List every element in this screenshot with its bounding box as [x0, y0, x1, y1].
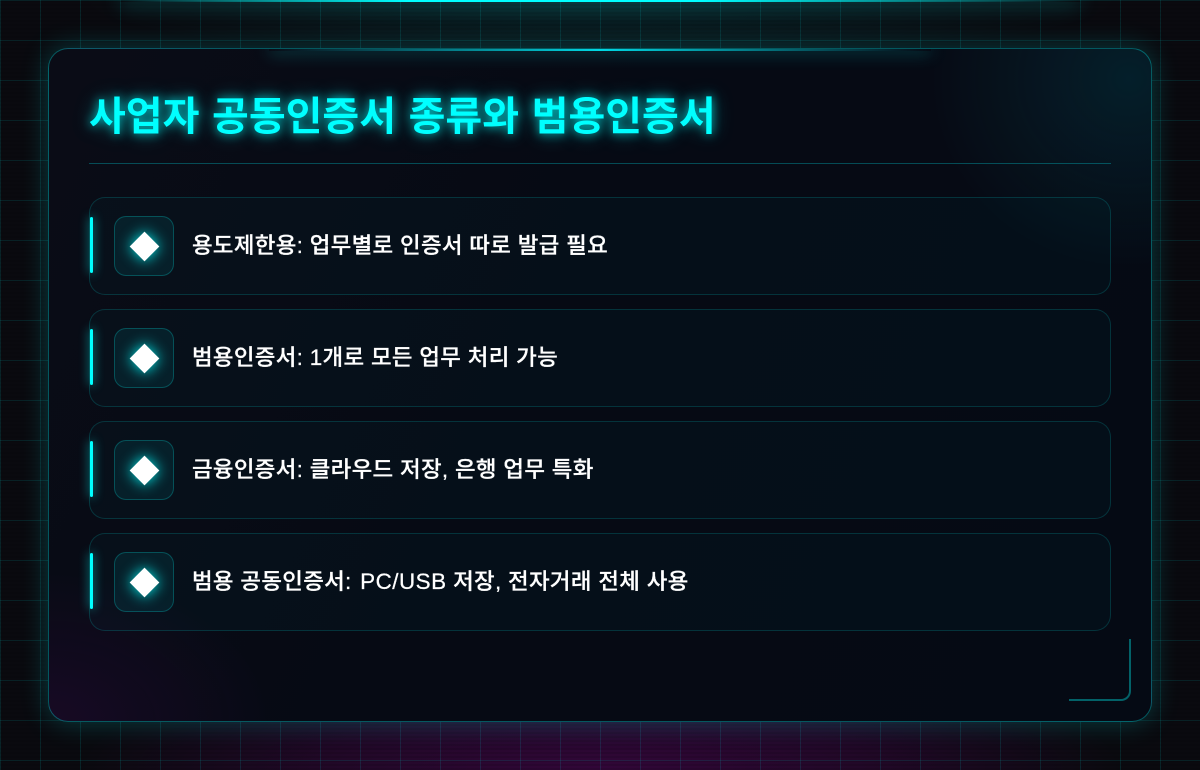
icon: diamond — [114, 328, 174, 388]
icon: diamond — [114, 440, 174, 500]
list item: 범용 공동인증서 — [89, 533, 1111, 631]
icon: diamond — [114, 552, 174, 612]
panel top accent bar — [269, 49, 931, 51]
item text: 용도제한용: 업무별로 인증서 따로 발급 필요 — [192, 233, 608, 258]
item text: 범용인증서: 1개로 모든 업무 처리 가능 — [192, 345, 558, 370]
title: 사업자 공동인증서 종류와 범용인증서 — [89, 95, 716, 139]
accent bar — [90, 441, 93, 497]
accent bar — [90, 553, 93, 609]
icon: diamond — [114, 216, 174, 276]
item text: 범용 공동인증서: PC/USB 저장, 전자거래 전체 사용 — [192, 569, 689, 594]
list item: 범용인증서 — [89, 309, 1111, 407]
list item: 금융인증서 — [89, 421, 1111, 519]
accent bar — [90, 217, 93, 273]
list item: 용도제한용 — [89, 197, 1111, 295]
accent bar — [90, 329, 93, 385]
corner bracket — [1069, 639, 1131, 701]
top glowing bar — [120, 0, 1080, 2]
item text: 금융인증서: 클라우드 저장, 은행 업무 특화 — [192, 457, 594, 482]
